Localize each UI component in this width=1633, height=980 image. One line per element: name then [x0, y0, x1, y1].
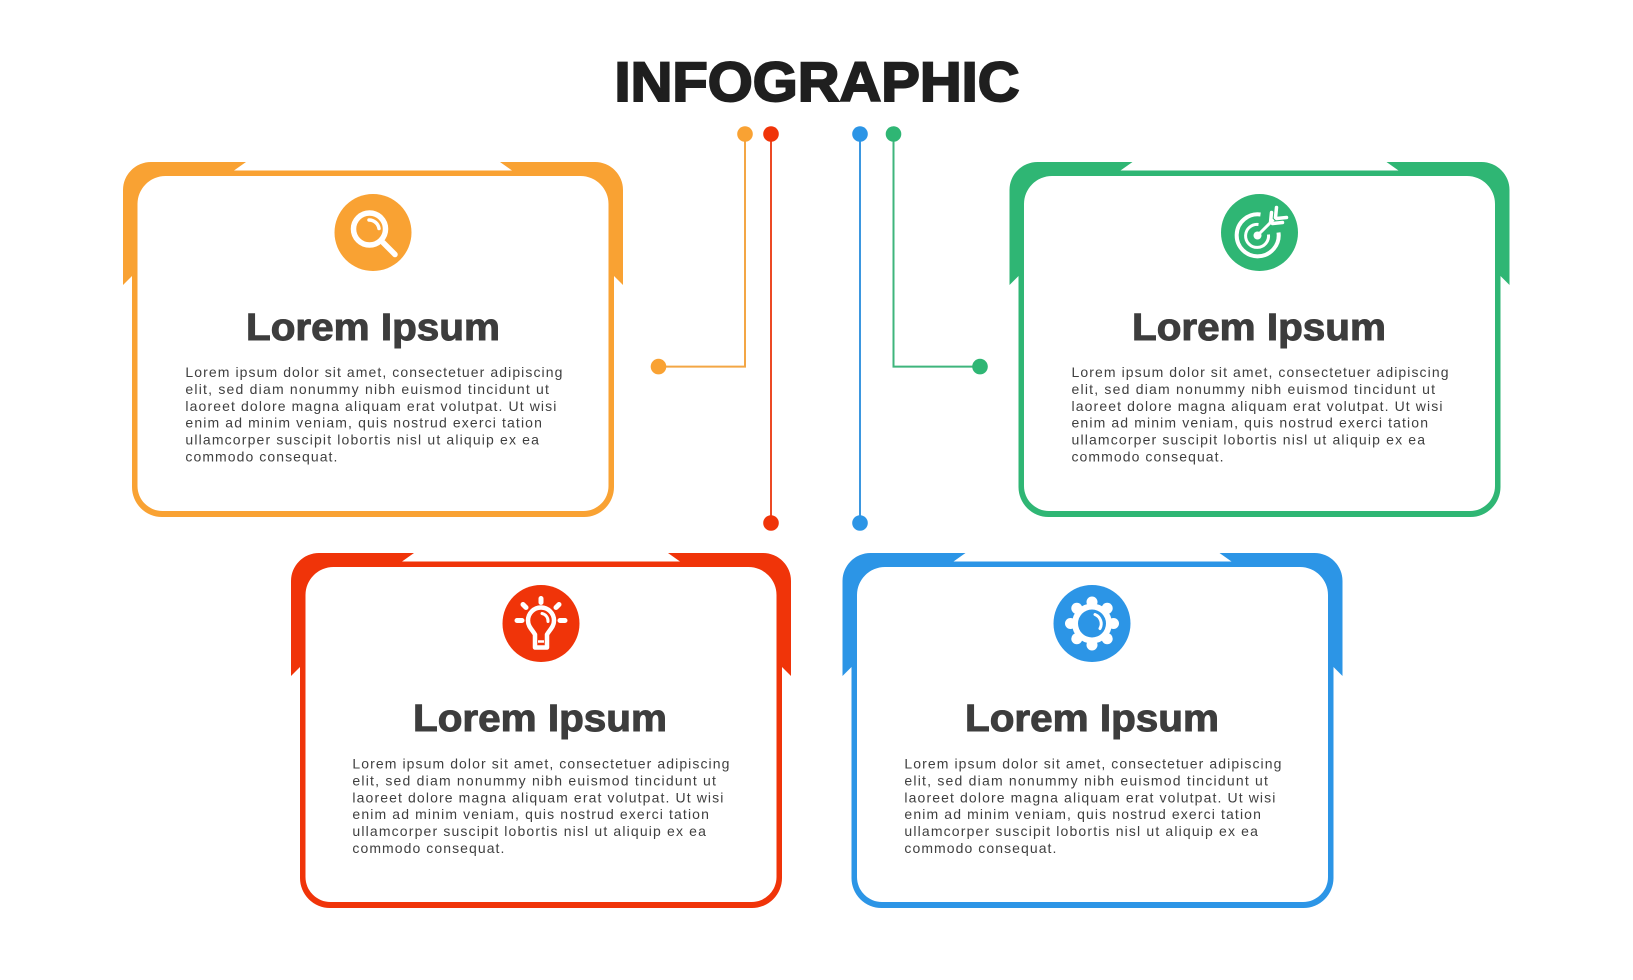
body text: elit, sed diam nonummy nibh euismod tincidunt ut [352, 772, 716, 788]
heading: Lorem Ipsum [246, 307, 500, 349]
icon: light bulb [502, 585, 580, 662]
body text: Lorem ipsum dolor sit amet, consectetuer adipiscing [185, 364, 562, 380]
heading: Lorem Ipsum [1132, 307, 1386, 349]
body text: Lorem ipsum dolor sit amet, consectetuer adipiscing [352, 756, 729, 772]
body text [185, 364, 562, 464]
body text: enim ad minim veniam, quis nostrud exerci tation [352, 806, 709, 822]
body text: commodo consequat. [904, 840, 1056, 856]
title: INFOGRAPHIC [614, 50, 1020, 113]
body text: commodo consequat. [352, 840, 504, 856]
body text: commodo consequat. [1072, 448, 1224, 464]
body text: enim ad minim veniam, quis nostrud exerci tation [904, 806, 1261, 822]
body text: enim ad minim veniam, quis nostrud exerci tation [1072, 415, 1428, 431]
body text: ullamcorper suscipit lobortis nisl ut aliquip ex ea [352, 823, 706, 839]
panel: green target [1010, 162, 1510, 517]
connector: blue [852, 126, 868, 531]
panel frame [842, 553, 1342, 908]
body text: ullamcorper suscipit lobortis nisl ut aliquip ex ea [904, 823, 1258, 839]
body text: laoreet dolore magna aliquam erat volutpat. Ut wisi [1072, 398, 1442, 414]
connector: green [886, 126, 988, 374]
panel frame [1010, 162, 1510, 517]
body text: enim ad minim veniam, quis nostrud exerci tation [185, 415, 542, 431]
panel frame [123, 162, 623, 517]
body text: commodo consequat. [185, 448, 337, 464]
panel: orange search [123, 162, 623, 517]
body text: Lorem ipsum dolor sit amet, consectetuer adipiscing [904, 756, 1281, 772]
body text: laoreet dolore magna aliquam erat volutpat. Ut wisi [904, 789, 1275, 805]
body text: ullamcorper suscipit lobortis nisl ut aliquip ex ea [185, 432, 539, 448]
heading: Lorem Ipsum [413, 698, 667, 740]
body text: laoreet dolore magna aliquam erat volutpat. Ut wisi [352, 789, 723, 805]
heading: Lorem Ipsum [965, 698, 1219, 740]
body text: Lorem ipsum dolor sit amet, consectetuer adipiscing [1072, 364, 1448, 380]
body text [904, 756, 1281, 856]
connector: red [763, 126, 779, 531]
icon: magnifying glass [334, 194, 412, 271]
panel: red idea [291, 553, 791, 908]
body text [1072, 364, 1448, 464]
body text: elit, sed diam nonummy nibh euismod tincidunt ut [1072, 381, 1435, 397]
icon: target with arrow [1221, 194, 1298, 271]
icon: gear [1054, 585, 1130, 662]
panel frame [291, 553, 791, 908]
body text [352, 756, 729, 856]
body text: elit, sed diam nonummy nibh euismod tincidunt ut [185, 381, 549, 397]
body text: elit, sed diam nonummy nibh euismod tincidunt ut [904, 772, 1268, 788]
connector: orange [651, 126, 753, 374]
body text: ullamcorper suscipit lobortis nisl ut aliquip ex ea [1072, 432, 1425, 448]
panel: blue settings [842, 553, 1342, 908]
body text: laoreet dolore magna aliquam erat volutpat. Ut wisi [185, 398, 556, 414]
